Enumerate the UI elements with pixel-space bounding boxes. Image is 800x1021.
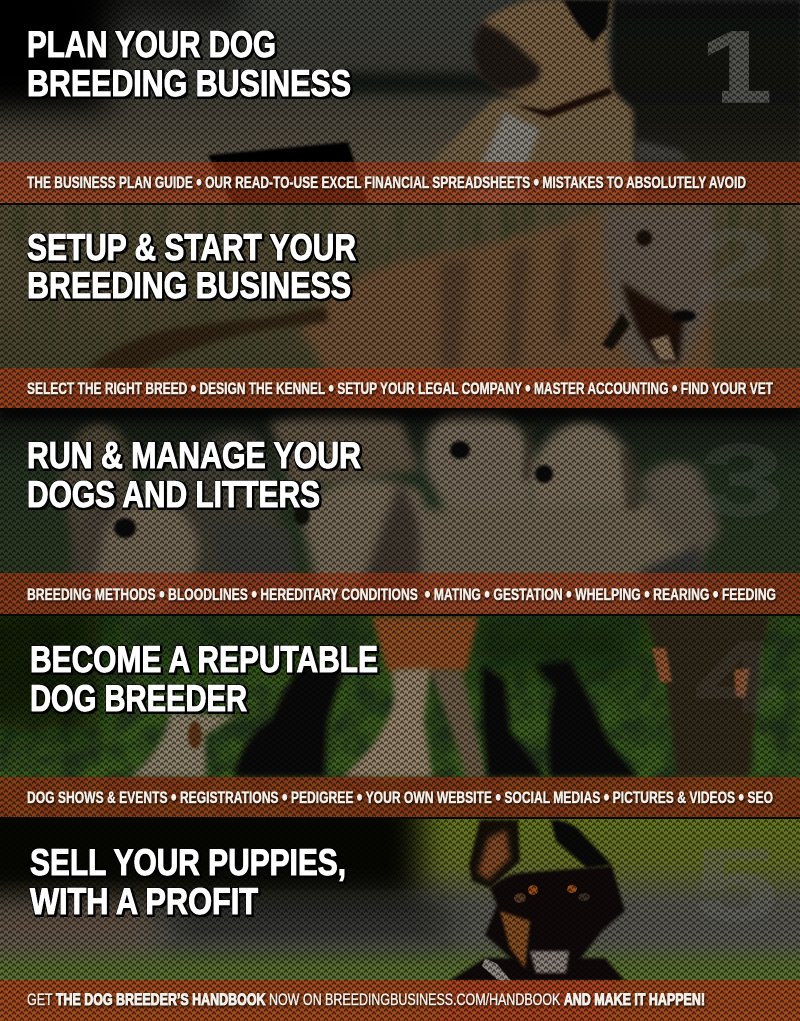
topics: setup: • bbox=[525, 376, 531, 400]
topics: run: • bbox=[159, 582, 165, 606]
photo: greyhound bbox=[87, 205, 714, 409]
topics: setup: • bbox=[328, 376, 334, 400]
topics: run: • bbox=[484, 582, 490, 606]
topics: run: BLOODLINES bbox=[165, 586, 251, 604]
topics: run: HEREDITARY CONDITIONS bbox=[257, 586, 425, 604]
heading: setup bbox=[27, 227, 356, 306]
heading: plan: PLAN YOUR DOG bbox=[27, 24, 276, 65]
heading: run bbox=[27, 435, 361, 515]
bar: setup topics bbox=[0, 368, 800, 408]
heading: sell bbox=[30, 842, 346, 922]
topics: run: • bbox=[644, 582, 650, 606]
bar: sell call to action bbox=[0, 980, 800, 1021]
heading: setup: BREEDING BUSINESS bbox=[27, 265, 351, 306]
number 5: 5 bbox=[694, 828, 778, 942]
topics: run: • bbox=[566, 582, 572, 606]
topics: reputable: SEO bbox=[744, 789, 773, 807]
topics: run: BREEDING METHODS bbox=[27, 586, 201, 604]
bar: run topics bbox=[0, 573, 800, 614]
topics: setup: SETUP YOUR LEGAL COMPANY bbox=[334, 380, 525, 398]
panel: setup business bbox=[0, 205, 800, 410]
number 2: 2 bbox=[695, 208, 775, 322]
topics: setup: • bbox=[672, 376, 677, 400]
topics: reputable: • bbox=[357, 784, 362, 810]
heading: reputable: BECOME A REPUTABLE bbox=[30, 639, 378, 680]
topics: reputable: • bbox=[604, 784, 609, 810]
bar: reputation topics bbox=[0, 777, 800, 817]
heading: setup: SETUP & START YOUR bbox=[27, 227, 356, 268]
topics: plan: • bbox=[196, 170, 202, 194]
photo: breeders and dogs bbox=[130, 616, 770, 777]
topics: setup: • bbox=[191, 376, 196, 400]
bar: plan topics bbox=[0, 162, 800, 203]
topics: reputable: • bbox=[171, 784, 177, 810]
topics: reputable: DOG SHOWS & EVENTS bbox=[27, 789, 219, 807]
heading: run: RUN & MANAGE YOUR bbox=[27, 435, 361, 476]
topics: setup: SELECT THE RIGHT BREED bbox=[27, 380, 248, 398]
call to action: GET THE DOG BREEDER’S HANDBOOK NOW ON BREEDINGBUSINESS.COM/HANDBOOK AND MAKE IT HAPPEN! bbox=[27, 991, 705, 1009]
topics: run: FEEDING bbox=[718, 586, 776, 604]
topics: plan: • bbox=[533, 170, 539, 194]
topics: run: • bbox=[713, 582, 718, 606]
topics: setup: MASTER ACCOUNTING bbox=[531, 380, 672, 398]
topics: reputable: • bbox=[738, 784, 744, 810]
topics: run: GESTATION bbox=[490, 586, 566, 604]
panel: sell puppies bbox=[0, 819, 800, 1021]
photo: pug bbox=[433, 0, 690, 204]
heading: reputable bbox=[30, 639, 378, 719]
topics: reputable: SOCIAL MEDIAS bbox=[501, 789, 604, 807]
number 3: 3 bbox=[700, 423, 784, 537]
heading: plan: BREEDING BUSINESS bbox=[27, 63, 351, 104]
topics: reputable: • bbox=[495, 784, 501, 810]
topics: run: MATING bbox=[430, 586, 484, 604]
heading: run: DOGS AND LITTERS bbox=[27, 474, 320, 515]
panel: reputable breeder bbox=[0, 600, 800, 819]
topics: setup: DESIGN THE KENNEL bbox=[196, 380, 328, 398]
heading: sell: SELL YOUR PUPPIES, bbox=[30, 842, 346, 883]
topics: run: • bbox=[425, 582, 430, 606]
topics: run: • bbox=[251, 582, 257, 606]
number 4: 4 bbox=[695, 620, 777, 734]
topics: reputable: YOUR OWN WEBSITE bbox=[362, 789, 495, 807]
topics: reputable: PEDIGREE bbox=[288, 789, 357, 807]
topics: reputable: REGISTRATIONS bbox=[177, 789, 282, 807]
topics: reputable: PICTURES & VIDEOS bbox=[609, 789, 738, 807]
heading: reputable: DOG BREEDER bbox=[30, 678, 247, 719]
topics: plan: OUR READ-TO-USE EXCEL FINANCIAL SPREADSHEETS bbox=[202, 174, 533, 192]
topics: plan: THE BUSINESS PLAN GUIDE bbox=[27, 174, 255, 192]
panel: run and manage bbox=[0, 402, 800, 616]
photo: black and tan dog bbox=[446, 819, 626, 996]
photo: golden puppies bbox=[0, 402, 800, 615]
topics: reputable: • bbox=[282, 784, 288, 810]
topics: run: WHELPING bbox=[572, 586, 644, 604]
panel: plan your business bbox=[0, 0, 800, 205]
topics: run: REARING bbox=[650, 586, 713, 604]
heading: plan bbox=[27, 24, 351, 104]
heading: sell: WITH A PROFIT bbox=[30, 881, 258, 922]
number 1: 1 bbox=[700, 10, 772, 124]
